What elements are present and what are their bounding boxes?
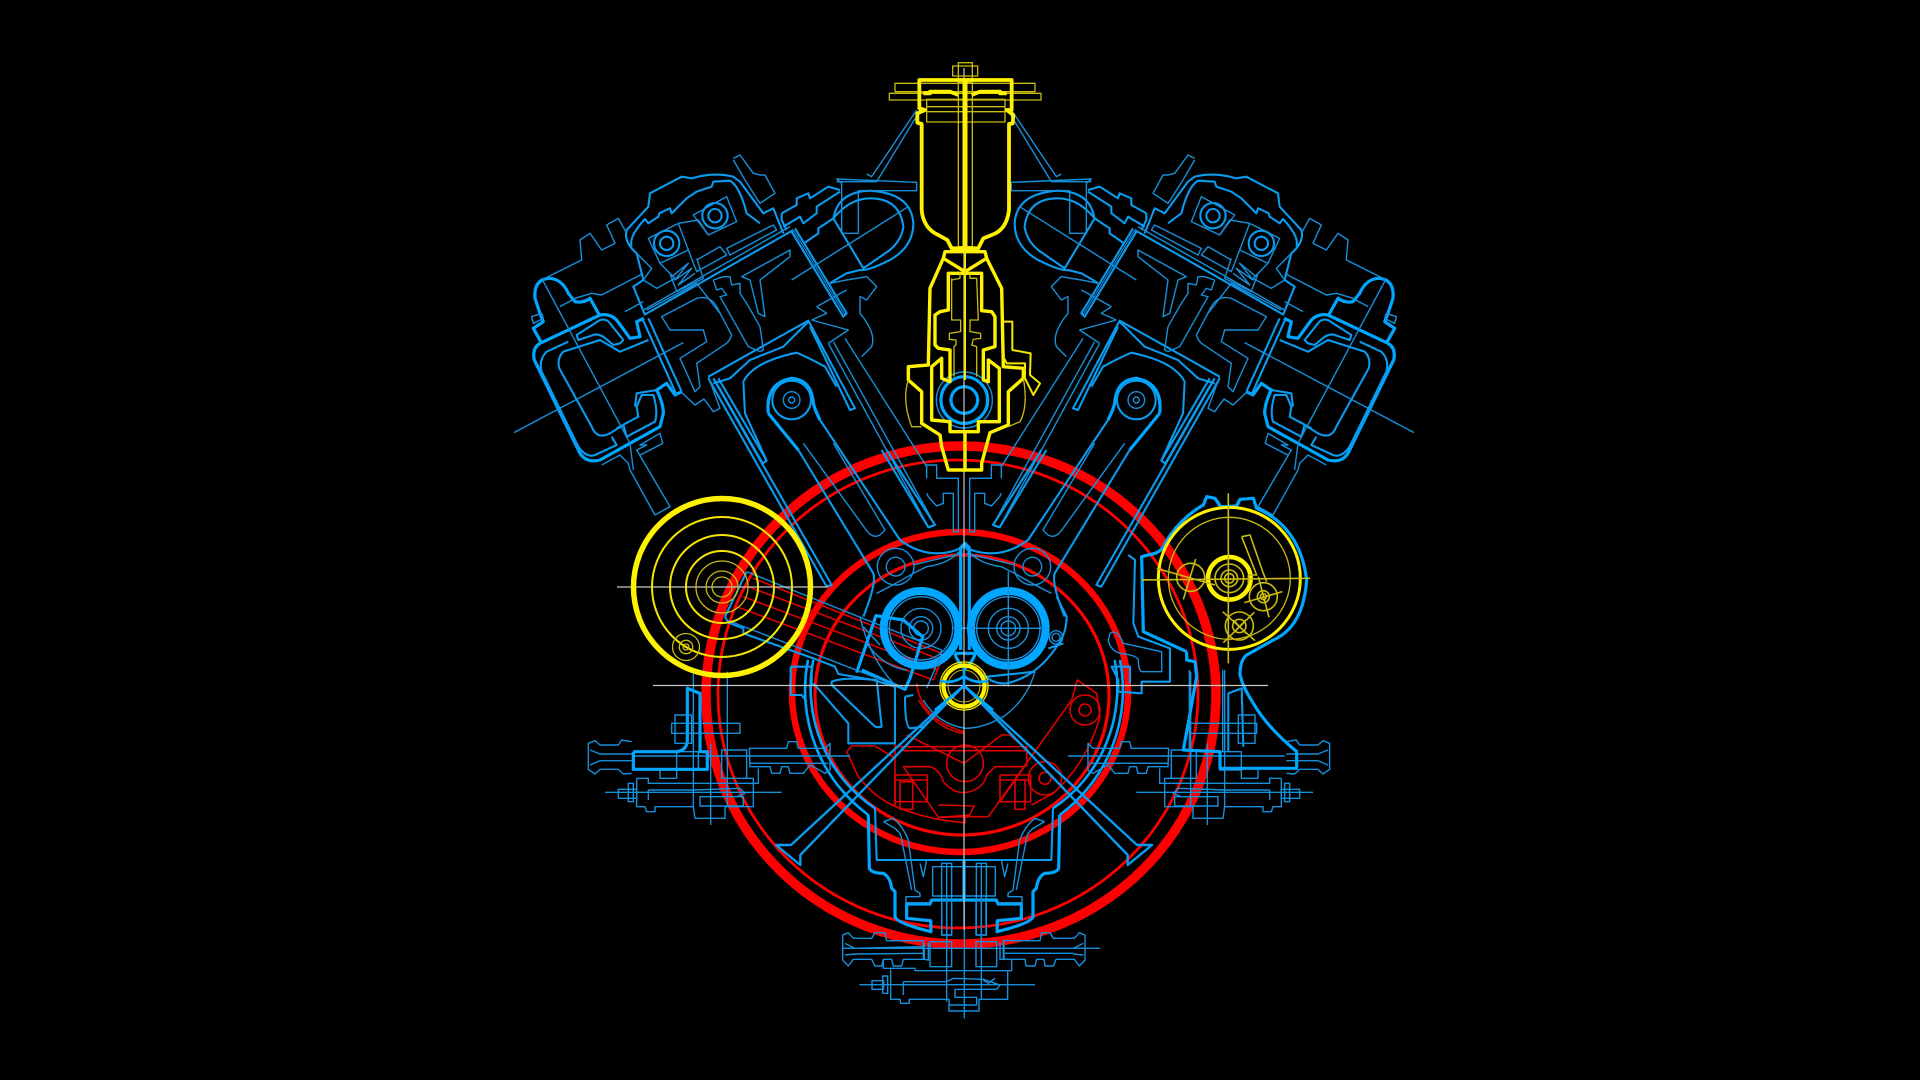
- block, rods and sump half: [776, 420, 964, 865]
- lower bold outline: [908, 252, 1023, 470]
- red flywheel rings: [706, 446, 1216, 944]
- yellow lower injector: [906, 250, 1040, 470]
- yellow injector body: [889, 63, 1041, 250]
- outer rim: [634, 498, 810, 676]
- lower box: [891, 969, 1008, 1011]
- link rod: [725, 572, 928, 743]
- side fuel line: [1003, 322, 1040, 395]
- red link rod lines: [737, 578, 963, 732]
- left bolt and thick housing: [633, 688, 740, 769]
- crank web and journals: [860, 543, 1067, 728]
- valve train: [514, 110, 935, 527]
- exhaust manifold: [533, 278, 682, 461]
- gear rim: [1158, 507, 1300, 649]
- journal inner rings: [860, 572, 1063, 728]
- injector bold outline: [917, 80, 1013, 250]
- inner rings: [672, 561, 748, 660]
- right pulley: [1003, 933, 1085, 966]
- red crank counterweight detail: [847, 680, 1100, 823]
- housing thin: [1108, 632, 1257, 752]
- left piston and link: [588, 572, 942, 825]
- left pulley: [843, 933, 923, 966]
- case curve at right journal: [975, 597, 1067, 683]
- housing inner: [1112, 555, 1243, 752]
- thick housing: [633, 688, 707, 769]
- sump inner: [875, 808, 964, 860]
- white axes: [617, 68, 1268, 930]
- blue rod hub over crank pin: [935, 668, 993, 710]
- sump centre bar: [962, 860, 966, 900]
- centre web: [955, 543, 975, 668]
- left cylinder bank: [514, 110, 964, 938]
- sump outline: [868, 815, 964, 932]
- pulley body: [588, 670, 850, 825]
- sump channel: [883, 818, 964, 938]
- blue centre bearing under injector: [936, 372, 992, 428]
- bottom pulley assembly: [843, 900, 1100, 1018]
- piston pin: [783, 392, 800, 408]
- hub block: [924, 943, 1004, 960]
- housing outline: [1142, 497, 1307, 768]
- crank rods diagonal: [776, 685, 964, 865]
- cylinder head and manifold: [514, 110, 935, 587]
- connecting rod eye: [768, 378, 820, 450]
- mirrored right cylinder bank: [964, 110, 1414, 938]
- mirrored engine bank: left and right: [514, 110, 1414, 938]
- planet gears and axes: [1142, 493, 1310, 663]
- concentric rings: [652, 517, 792, 657]
- right pulley assembly mirror: [1068, 670, 1330, 825]
- cylinder rods: [798, 420, 964, 617]
- piston: [857, 616, 923, 689]
- oil slot and stem: [803, 443, 964, 593]
- manifold inner passage: [541, 320, 657, 456]
- centre rod: [964, 250, 966, 380]
- sump half: [868, 808, 964, 938]
- centre yellow crank pin ring: [940, 662, 988, 710]
- injector thin details: [889, 63, 1041, 247]
- bolt: [672, 715, 740, 743]
- journal bearings: [884, 591, 1046, 666]
- link rod thin: [727, 572, 942, 688]
- right gear housing: [1108, 497, 1307, 768]
- cylinder head outline: [626, 175, 913, 587]
- left pulley assembly: [588, 670, 850, 825]
- crankcase arcs: [805, 660, 875, 815]
- yellow gear set right: [1142, 493, 1310, 663]
- lower thin details: [906, 273, 1025, 427]
- yellow flywheel left: [634, 498, 810, 676]
- gear inner circle and hub: [1168, 517, 1290, 639]
- flanges: [643, 228, 847, 395]
